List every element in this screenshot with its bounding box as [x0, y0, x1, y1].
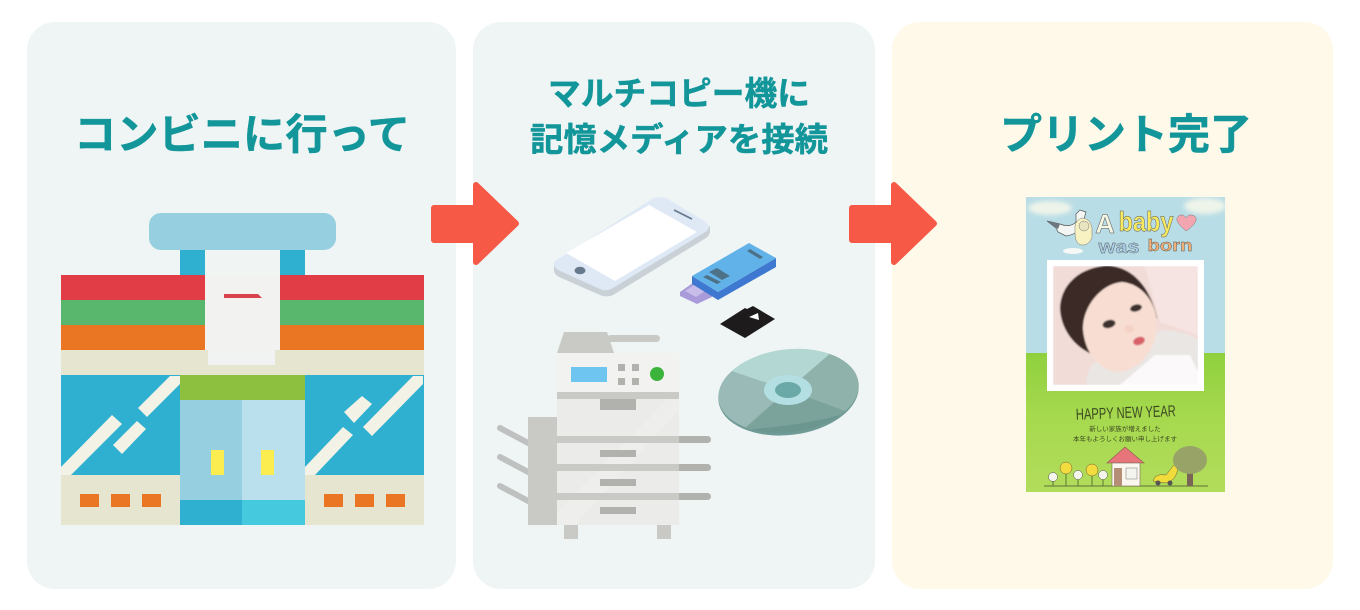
card title: A [1095, 209, 1115, 239]
baby photo [1053, 266, 1198, 385]
illustration: garden and house [1044, 446, 1208, 486]
card title [1095, 206, 1196, 257]
card title: born [1148, 236, 1192, 255]
icon: smartphone [554, 197, 710, 296]
illustration: stork [1047, 210, 1092, 254]
icon: heart [1177, 215, 1196, 231]
card title: was [1097, 237, 1140, 257]
card greeting: 本年もよろしくお願い申し上げます [1073, 434, 1178, 443]
heading: step 3: プリント完了 [1000, 111, 1252, 158]
heading: step 1: コンビニに行って [74, 111, 410, 158]
panel: step 2 multi-copier [473, 22, 898, 589]
card greeting [1073, 403, 1178, 443]
panel: step 1 convenience store [27, 22, 456, 589]
clouds [1028, 198, 1226, 215]
panel: step 3 print complete [892, 22, 1333, 589]
arrow: step 1 to step 2 [434, 185, 516, 262]
icon: USB memory [680, 243, 776, 304]
card greeting: 新しい家族が増えました [1089, 424, 1161, 433]
icon: SD card [720, 306, 775, 338]
icon: CD disc [718, 348, 859, 436]
icon: convenience store [61, 213, 424, 525]
arrow: step 2 to step 3 [852, 185, 934, 262]
heading: step 2: 記憶メディアを接続 [530, 121, 828, 158]
heading: step 2: マルチコピー機に [548, 75, 810, 112]
photo frame [1047, 260, 1204, 391]
card title: baby [1118, 206, 1174, 237]
printed postcard [1026, 197, 1226, 492]
card greeting: HAPPY NEW YEAR [1076, 403, 1176, 424]
icon: multifunction copier [500, 332, 711, 539]
heading: step 2 [530, 75, 828, 158]
